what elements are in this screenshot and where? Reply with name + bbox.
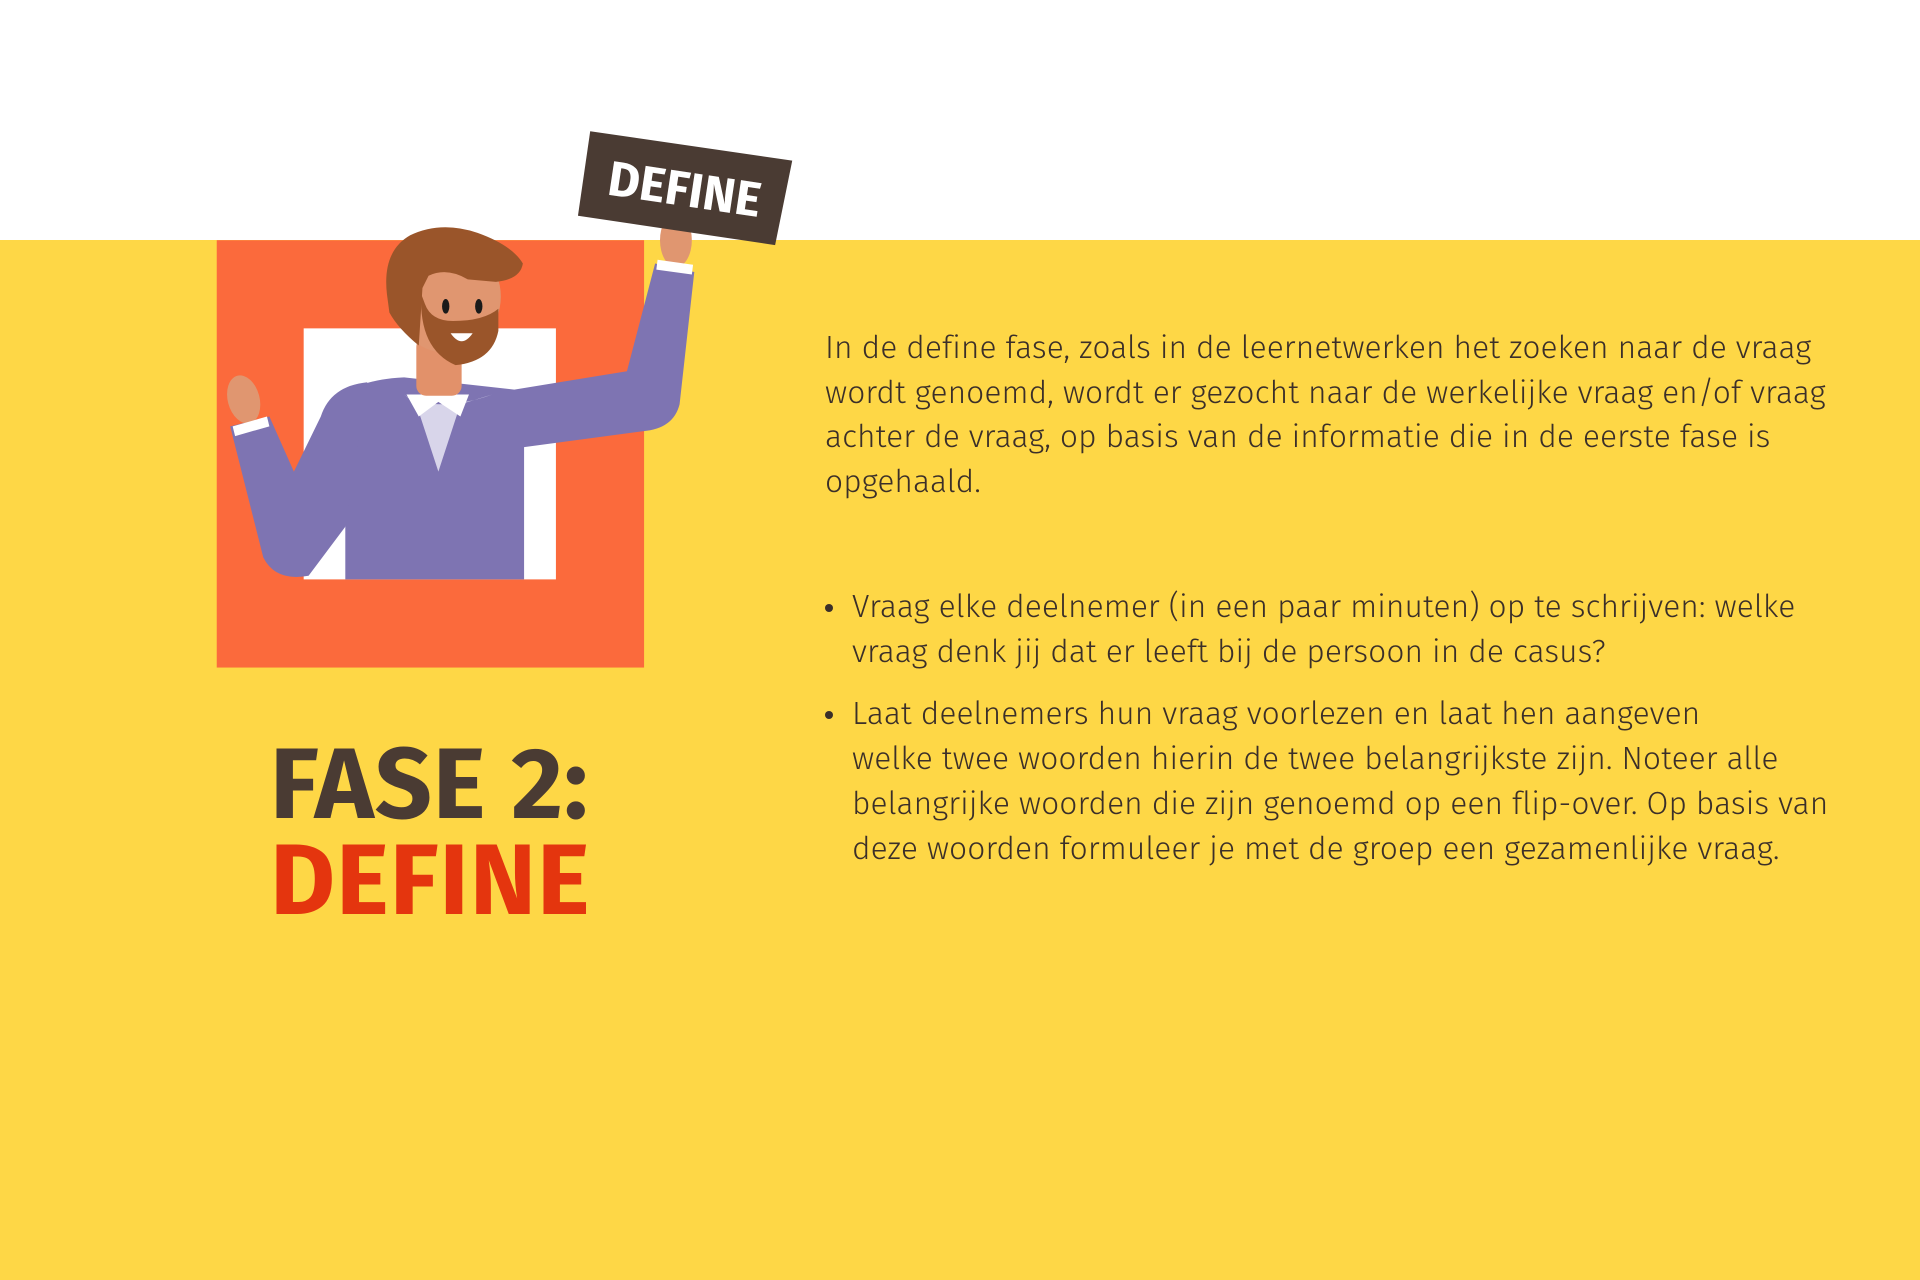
sign: DEFINE: DEFINE — [604, 149, 765, 230]
sign: DEFINE — [578, 131, 792, 245]
title: FASE 2: DEFINE: DEFINE — [270, 820, 591, 941]
figure — [222, 213, 694, 579]
bullet list: Vraag elke deelnemer (in een paar minuten) op te schrijven: welke vraag denk jij dat er leeft bij de persoon in de casus? — [852, 588, 1795, 671]
title: FASE 2: DEFINE: FASE 2: — [270, 724, 589, 845]
intro paragraph: In de define fase, zoals in de leernetwerken het zoeken naar de vraag wordt genoemd, wordt er gezocht naar de werkelijke vraag en/of vraag achter de vraag, op basis van de informatie die in de eerste fase is opgehaald. — [825, 329, 1826, 501]
bullet list: welke twee woorden hierin de twee belangrijkste zijn. Noteer alle belangrijke woorden die zijn genoemd op een flip-over. Op basis van deze woorden formuleer je met de groep een gezamenlijke vraag. — [852, 740, 1828, 868]
orange square frame — [217, 240, 644, 668]
bullet list — [825, 588, 1828, 868]
bullet list: Laat deelnemers hun vraag voorlezen en laat hen aangeven — [852, 695, 1700, 733]
title: FASE 2: DEFINE — [270, 724, 591, 941]
